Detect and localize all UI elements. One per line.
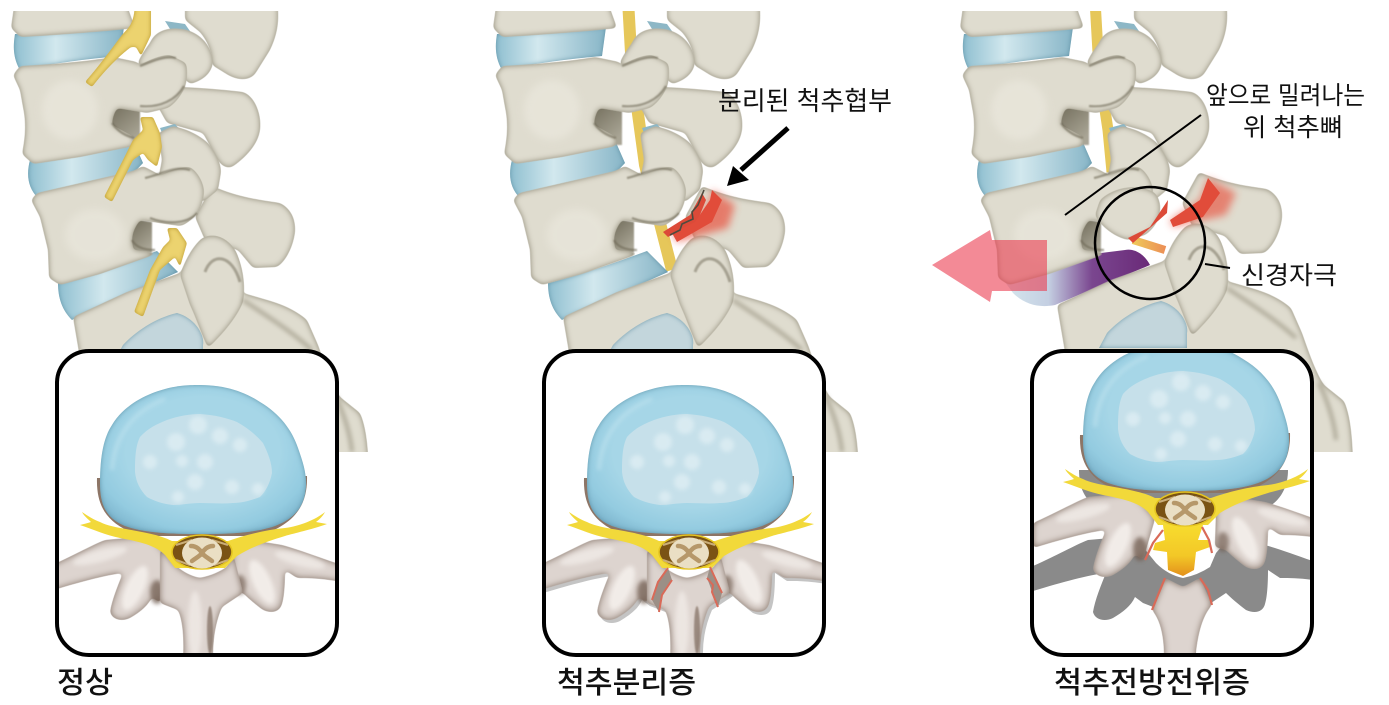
label: spondylolysis: 척추분리증 <box>557 667 696 700</box>
fracture: red pars defect <box>663 190 735 242</box>
arrow: anterior slip <box>932 230 1047 302</box>
label: spondylolisthesis: 척추전방전위증 <box>1054 667 1250 700</box>
callout text: upper vertebra pushed forward <box>1206 82 1365 142</box>
leader line: nerve irritation <box>1205 264 1230 268</box>
arrow: pointing to defect <box>727 128 788 186</box>
label: normal: 정상 <box>57 667 113 700</box>
side view: spondylolisthesis spine <box>960 0 1353 463</box>
inset: spondylolysis cross-section <box>537 351 832 662</box>
panel: spondylolisthesis <box>932 0 1365 700</box>
side view: normal lumbar spine <box>11 0 369 475</box>
inset: normal cross-section <box>50 351 342 662</box>
callout text: upper vertebra pushed forward: 위 척추뼈 <box>1243 114 1343 142</box>
inset: spondylolisthesis cross-section <box>1032 342 1325 662</box>
callout text: separated pars: 분리된 척추협부 <box>718 86 892 116</box>
leader line: upper vertebra <box>1065 115 1201 215</box>
callout text: upper vertebra pushed forward: 앞으로 밀려나는 <box>1206 82 1365 110</box>
circle: nerve irritation area <box>1095 187 1205 299</box>
vertebral process displaced forward <box>1095 187 1160 240</box>
panel: spondylolysis <box>493 0 892 700</box>
panel: normal spine <box>11 0 369 700</box>
side view: spondylolysis spine <box>493 0 859 475</box>
fracture: red defects <box>1128 178 1236 243</box>
callout text: nerve irritation: 신경자극 <box>1241 262 1337 290</box>
